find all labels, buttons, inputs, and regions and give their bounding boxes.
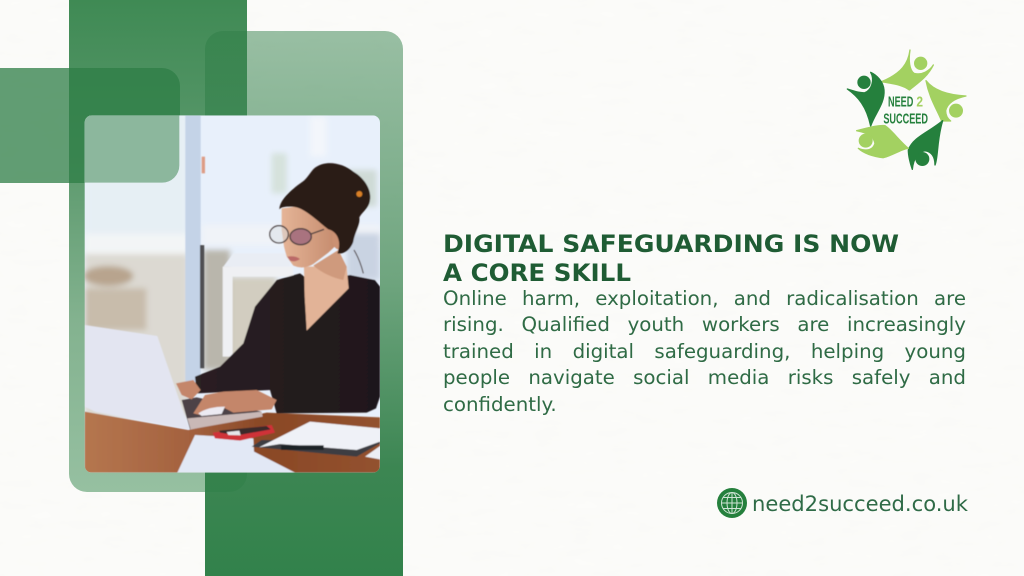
text block: body paragraph: people navigate social media risks safely and [443, 366, 966, 389]
laptop [182, 397, 262, 429]
icon: light figure top [882, 50, 933, 90]
logo wordmark: 2 [916, 94, 923, 111]
translucent overlap of block on photo [85, 115, 179, 183]
icon: light figure right [926, 81, 966, 121]
panel: tall green block [205, 31, 403, 576]
torso and arm [195, 273, 380, 413]
icon: dark figure bottom [908, 121, 943, 169]
logo: Need 2 Succeed [846, 49, 967, 170]
photo: woman working at laptop [83, 115, 382, 473]
text block: body paragraph: trained in digital safeguarding, helping young [443, 340, 966, 363]
logo wordmark [883, 94, 928, 127]
panel: translucent green block left [0, 68, 180, 183]
logo wordmark: NEED [888, 94, 913, 111]
heading [443, 230, 899, 287]
panel: dark green block top left [69, 0, 247, 492]
hands [176, 380, 201, 399]
text block: body paragraph: confidently. [443, 393, 557, 416]
clipboard [252, 440, 380, 457]
icon: globe [717, 488, 747, 518]
text block: body paragraph: rising. Qualified youth workers are increasingly [443, 313, 966, 336]
text block: body paragraph: Online harm, exploitation, and radicalisation are [443, 287, 966, 310]
table [85, 412, 380, 473]
neck and chest [304, 267, 349, 331]
website url: need2succeed.co.uk [752, 492, 969, 517]
heading: A CORE SKILL [443, 259, 631, 287]
logo wordmark: SUCCEED [883, 110, 928, 127]
hair [279, 163, 370, 254]
phone [213, 425, 275, 441]
icon: light figure lower left [857, 126, 908, 158]
background and decorative shapes with photo [0, 0, 403, 576]
glasses [270, 226, 324, 245]
heading: DIGITAL SAFEGUARDING IS NOW [443, 230, 899, 258]
icon: dark figure left [847, 72, 884, 126]
face [282, 207, 338, 267]
